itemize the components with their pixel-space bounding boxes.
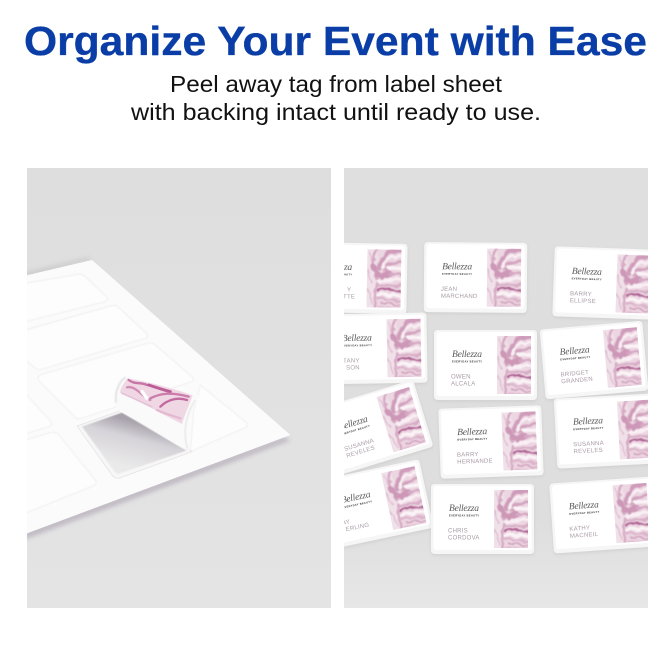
tag edge shading [185,400,195,449]
empty label slot [77,411,192,478]
name tag: partial top left: Bellezza [322,262,353,273]
name tag: Bridget Granden: EVERYDAY BEAUTY [560,355,591,361]
name tag: Kathy Macneil: EVERYDAY BEAUTY [569,510,600,516]
subtitle: Peel away tag from label sheet [170,71,503,97]
name tag: Susanna Reveles, tilted: Bellezza [338,415,369,433]
name tag: Susanna Reveles, tilted: REVELES [346,445,376,460]
name tag: Kathy Macneil [549,476,657,555]
name tag: Owen Alcala: EVERYDAY BEAUTY [452,360,482,364]
name tag: Barry Ellipse [552,246,648,321]
name tag: partial Berling, tilted: AY [342,519,351,527]
name tag: Bridget Granden: GRANDEN [561,377,593,385]
name tag: Barry Ellipse: ELLIPSE [570,298,596,305]
name tag: Barry Hernande [438,405,544,480]
panel: finished name tags [344,168,648,608]
name tag: Bridget Granden [540,321,648,401]
name tag: partial Tiffany: SON [346,365,360,372]
label sheet [25,260,290,534]
name tag: Bridget Granden: Bellezza [559,345,590,358]
name tag: Owen Alcala: Bellezza [452,350,482,360]
name tag: Barry Ellipse: Bellezza [572,267,602,278]
name tag: Susanna Reveles, tilted [344,382,432,474]
name tag: Susanna Reveles, right: REVELES [573,448,603,455]
name tag: Kathy Macneil: KATHY [569,525,590,533]
tag print [120,378,193,424]
name tag: partial Tiffany [344,312,428,386]
peeled tag [120,410,190,450]
name tag: partial top left: EVERYDAY BEAUTY [322,272,352,276]
name tag: Chris Cordova [431,484,534,556]
name tag: partial top left [344,242,408,314]
name tag: Kathy Macneil: MACNEIL [570,532,599,540]
name tag: Barry Ellipse: BARRY [570,291,592,298]
name tag: Jean Marchand: JEAN [441,287,457,293]
name tag: partial Tiffany: EVERYDAY BEAUTY [342,343,372,348]
name tag: Jean Marchand: EVERYDAY BEAUTY [442,272,472,276]
name tag: Jean Marchand: Bellezza [442,262,472,272]
name tag: Susanna Reveles, tilted: EVERYDAY BEAUTY [340,424,370,436]
name tag: partial Berling, tilted [344,460,431,548]
sheet label outlines [200,386,201,387]
name tag: Susanna Reveles, right: Bellezza [573,416,603,428]
name tag: Kathy Macneil: Bellezza [569,500,599,512]
name tag: partial Tiffany: Bellezza [342,334,372,344]
name tag: partial Berling, tilted: Bellezza [340,490,372,506]
name tag: partial Berling, tilted: EVERYDAY BEAUTY [342,499,373,509]
name tag: Chris Cordova: EVERYDAY BEAUTY [449,514,479,518]
name tag: Susanna Reveles, tilted: SUSANNA [344,438,375,453]
name tag: Barry Hernande: Bellezza [457,427,488,438]
title: Organize Your Event with Ease [24,18,647,64]
panel: label sheet with peeling tag [24,168,331,608]
name tag: Chris Cordova: CHRIS [448,528,468,534]
sheet shadow [24,437,290,540]
name tag: Chris Cordova: Bellezza [449,504,479,514]
name tag: partial top left: Y [347,287,351,293]
name tag: Barry Hernande: HERNANDE [457,458,493,466]
name tag: partial Tiffany: TANY [343,358,360,365]
name tag: Chris Cordova: CORDOVA [448,536,480,542]
name tag: Jean Marchand: MARCHAND [441,294,478,300]
name tag: partial Berling, tilted: ERLING [345,522,370,533]
subtitle [130,71,541,125]
name tag: Barry Ellipse: EVERYDAY BEAUTY [572,276,602,281]
name tag: Barry Hernande: BARRY [457,452,479,459]
name tag: Jean Marchand [424,242,527,314]
name tag: Susanna Reveles, right: SUSANNA [573,441,604,448]
name tag: partial top left: TTE [343,294,355,300]
name tag: Owen Alcala: ALCALA [451,382,476,388]
name tag: Owen Alcala [434,330,537,402]
subtitle: with backing intact until ready to use. [130,99,541,125]
name tag: Bridget Granden: BRIDGET [560,370,589,378]
name tag: Owen Alcala: OWEN [451,374,471,380]
name tag: Susanna Reveles, right [554,394,648,470]
name tag: Barry Hernande: EVERYDAY BEAUTY [457,437,488,442]
tag left shading [116,377,126,403]
name tag: Susanna Reveles, right: EVERYDAY BEAUTY [573,426,604,431]
